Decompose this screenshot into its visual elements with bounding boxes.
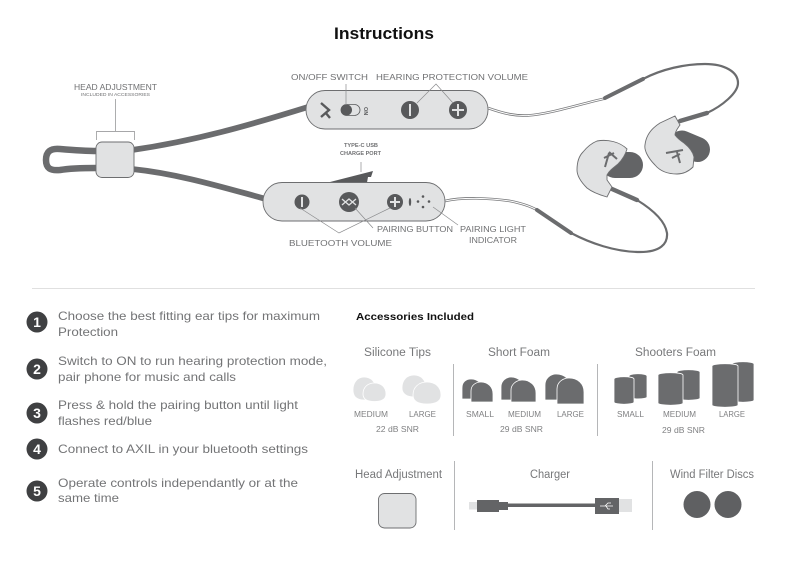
- pairing light indicator: [409, 195, 430, 208]
- label: pairing light indicator: PAIRING LIGHT: [460, 224, 527, 234]
- panel: short foam: Short Foam: [488, 347, 550, 359]
- panel: short foam: LARGE: [557, 410, 584, 419]
- title: Instructions: [334, 25, 434, 43]
- panel: silicone tips: [353, 347, 441, 434]
- label: on/off switch: [291, 72, 368, 105]
- panel: silicone tips: LARGE: [409, 410, 436, 419]
- step 2: [26, 354, 327, 384]
- panel: short foam: MEDIUM: [508, 410, 541, 419]
- panel: silicone tips: 22 dB SNR: [376, 425, 419, 434]
- panel: shooters foam: MEDIUM: [663, 410, 696, 419]
- icon: large silicone tips: [402, 375, 441, 404]
- step 1: [26, 309, 320, 339]
- charge port wedge: [330, 171, 373, 182]
- icon: medium shooters foam: [658, 370, 700, 405]
- label: head adjustment: INCLUDED IN ACCESSORIES: [81, 92, 150, 97]
- panel: shooters foam: 29 dB SNR: [662, 426, 705, 435]
- panel: short foam: 29 dB SNR: [500, 425, 543, 434]
- icon: small shooters foam: [614, 374, 647, 404]
- icon: large foam tips: [545, 374, 584, 404]
- panel: shooters foam: LARGE: [719, 410, 745, 419]
- head adjustment slider: [96, 142, 134, 178]
- step 1: Choose the best fitting ear tips for maximum: [58, 309, 320, 323]
- right earpiece: [645, 116, 698, 174]
- step 4: Connect to AXIL in your bluetooth settings: [58, 442, 308, 456]
- step 3: Press & hold the pairing button until light: [58, 398, 299, 412]
- step 2: Switch to ON to run hearing protection mode,: [58, 354, 327, 368]
- icon: large shooters foam: [712, 362, 754, 407]
- button: minus: [401, 101, 419, 119]
- panel: shooters foam: Shooters Foam: [635, 347, 716, 359]
- label: pairing button: PAIRING BUTTON: [377, 224, 453, 234]
- panel: charger: [469, 469, 632, 514]
- step 4: [26, 438, 308, 460]
- label: type-c usb charge port: [340, 143, 382, 172]
- step 2: 2: [33, 361, 41, 377]
- step 3: [26, 398, 299, 428]
- icon: medium silicone tips: [353, 377, 386, 402]
- button: pairing: [339, 192, 359, 212]
- panel: shooters foam: [614, 347, 754, 435]
- step 5: [26, 476, 298, 505]
- icon: axil logo: [321, 103, 330, 118]
- panel: short foam: [462, 347, 584, 434]
- step 2: pair phone for music and calls: [58, 370, 236, 384]
- left earpiece: [577, 140, 630, 197]
- wire: upper control to right earpiece: [488, 64, 738, 121]
- panel: wind filter discs: Wind Filter Discs: [670, 469, 754, 481]
- icon: on/off switch: ON: [362, 107, 368, 115]
- panel: silicone tips: MEDIUM: [354, 410, 388, 419]
- step 1: Protection: [58, 325, 118, 339]
- icon: medium foam tips: [501, 377, 536, 402]
- heading: accessories included: Accessories Included: [356, 311, 474, 323]
- label: hearing protection volume: [376, 72, 528, 103]
- panel: charger: Charger: [530, 469, 570, 481]
- label: pairing light indicator: [433, 207, 527, 245]
- button: plus: [449, 101, 467, 119]
- panel: short foam: SMALL: [466, 410, 495, 419]
- panel: head adjustment accessory: Head Adjustment: [355, 469, 443, 481]
- step 3: flashes red/blue: [58, 414, 152, 428]
- label: hearing protection volume: HEARING PROTECTION VOLUME: [376, 72, 528, 82]
- label: on/off switch: ON/OFF SWITCH: [291, 72, 368, 82]
- icon: usb cable: [469, 498, 632, 514]
- panel: head adjustment accessory: [355, 469, 443, 528]
- icon: on/off switch: [341, 104, 368, 116]
- lower control pod: [263, 182, 445, 221]
- wire: lower control to left earpiece: [445, 189, 667, 252]
- panel: shooters foam: SMALL: [617, 410, 645, 419]
- step 1: 1: [33, 314, 41, 330]
- step 4: 4: [33, 441, 41, 457]
- label: bluetooth volume: [289, 208, 392, 248]
- step 5: Operate controls independantly or at the: [58, 476, 298, 490]
- panel: wind filter discs: [670, 469, 754, 518]
- step 5: same time: [58, 491, 119, 505]
- label: head adjustment: [74, 82, 158, 140]
- label: type-c usb charge port: CHARGE PORT: [340, 151, 382, 157]
- label: pairing button: [355, 208, 453, 234]
- step 3: 3: [33, 405, 41, 421]
- button: plus: [387, 194, 403, 210]
- label: type-c usb charge port: TYPE-C USB: [344, 143, 378, 149]
- diagram: neckband headset: [46, 64, 738, 252]
- panel: silicone tips: Silicone Tips: [364, 347, 431, 359]
- button: minus: [294, 194, 310, 210]
- label: head adjustment: HEAD ADJUSTMENT: [74, 82, 158, 92]
- cord: head loop and neck cords: [46, 107, 308, 199]
- divider: [32, 288, 755, 290]
- label: bluetooth volume: BLUETOOTH VOLUME: [289, 238, 392, 248]
- label: pairing light indicator: INDICATOR: [469, 235, 517, 245]
- upper control pod: [306, 90, 488, 129]
- step 5: 5: [33, 483, 41, 499]
- icon: small foam tips: [462, 379, 493, 402]
